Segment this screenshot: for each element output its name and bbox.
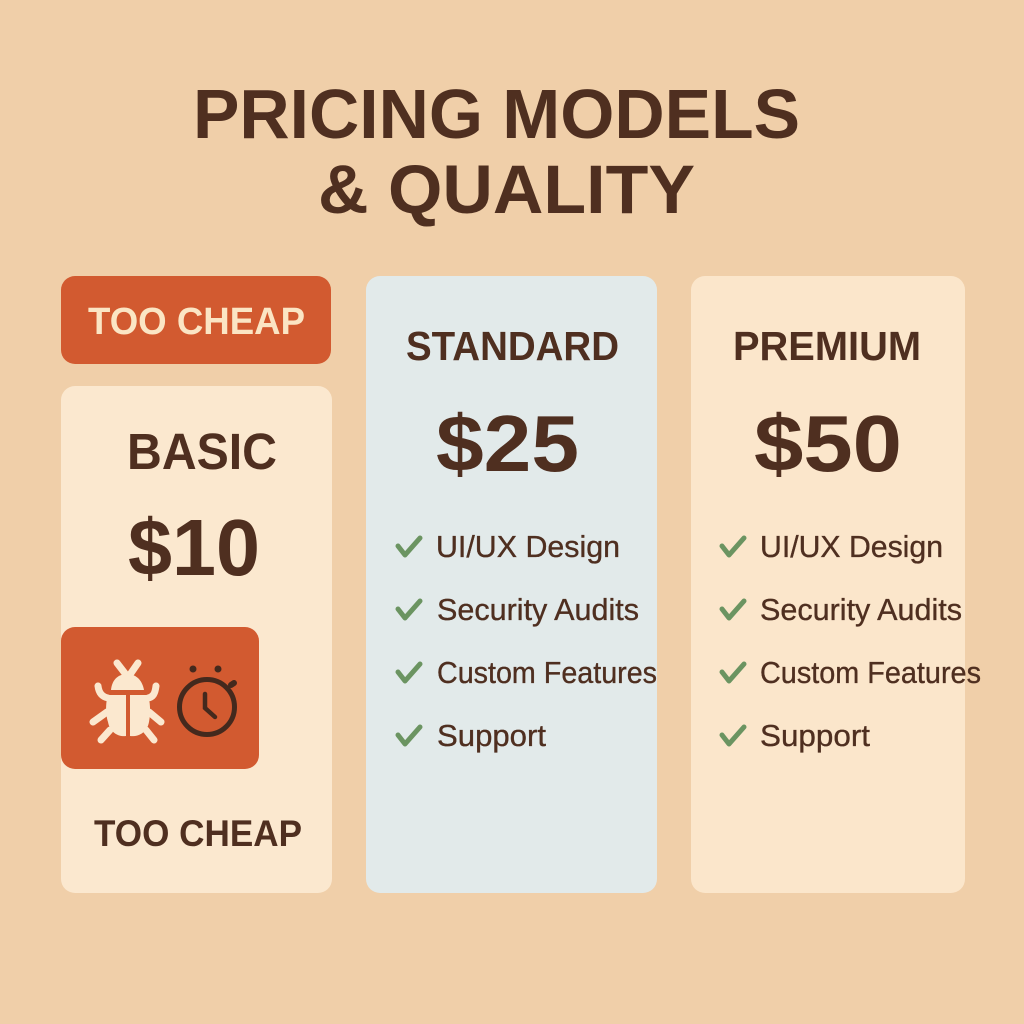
premium feature list xyxy=(722,529,981,753)
warning box with bug and timer icons xyxy=(61,627,259,769)
premium feature list: Custom Features xyxy=(760,655,981,690)
badge: too cheap: TOO CHEAP xyxy=(88,301,305,343)
standard feature list: UI/UX Design xyxy=(436,529,620,564)
standard feature list: Support xyxy=(437,718,546,753)
standard feature list xyxy=(398,529,657,753)
premium heading: PREMIUM xyxy=(733,323,921,369)
standard price: $25 xyxy=(436,399,579,488)
standard feature list: Security Audits xyxy=(437,592,639,627)
basic price: $10 xyxy=(128,503,260,592)
title xyxy=(193,75,800,228)
basic heading: BASIC xyxy=(127,423,277,480)
premium feature list: UI/UX Design xyxy=(760,529,943,564)
premium price: $50 xyxy=(754,399,902,488)
icon: bug xyxy=(93,663,161,740)
title: PRICING MODELS xyxy=(193,75,800,153)
panel: standard xyxy=(366,276,657,893)
standard heading: STANDARD xyxy=(406,323,619,369)
panel: premium xyxy=(691,276,981,893)
standard feature list: Custom Features xyxy=(437,655,657,690)
panel: basic xyxy=(61,386,332,893)
basic verdict: TOO CHEAP xyxy=(94,813,302,854)
premium feature list: Support xyxy=(760,718,870,753)
title: & QUALITY xyxy=(318,151,695,228)
badge: too cheap xyxy=(61,276,331,364)
premium feature list: Security Audits xyxy=(760,592,962,627)
icon: stopwatch xyxy=(180,666,234,734)
